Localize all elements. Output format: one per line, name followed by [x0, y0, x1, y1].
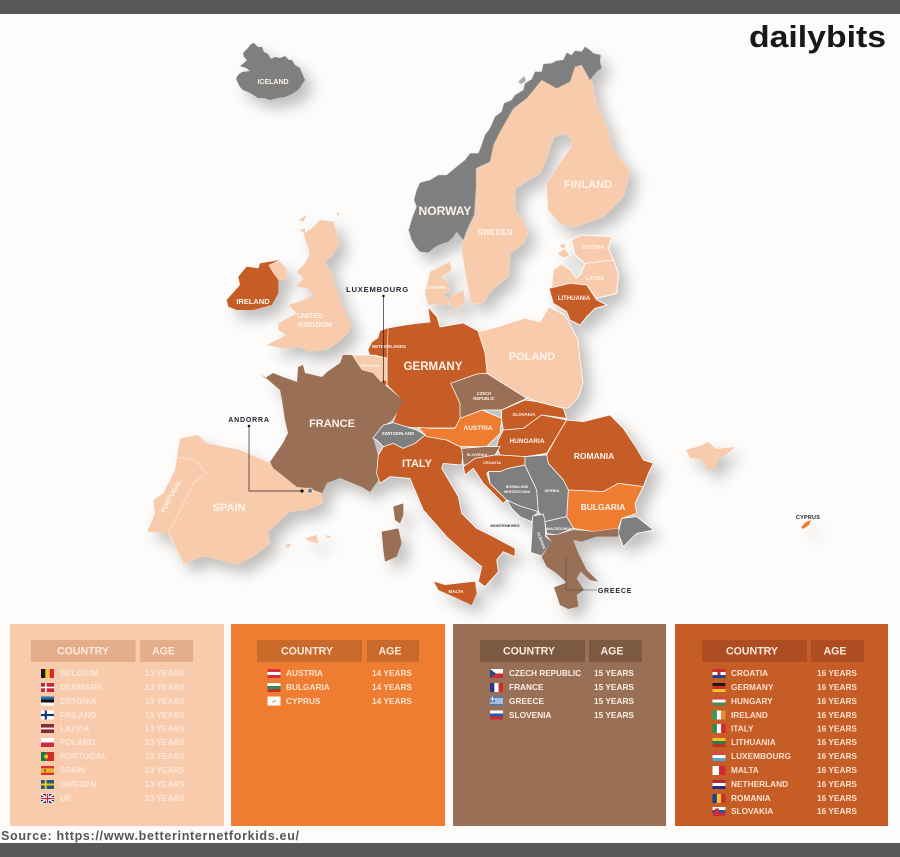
- rows: MALTA: [731, 765, 759, 775]
- country: Hungary: [497, 415, 567, 457]
- rows: 16 YEARS: [817, 696, 857, 706]
- rows: [712, 668, 857, 816]
- rows: GERMANY: [731, 682, 774, 692]
- rows: 16 YEARS: [817, 806, 857, 816]
- map country labels: MACEDONIA: [547, 526, 571, 531]
- country: Ireland: [227, 260, 280, 310]
- rows: FINLAND: [60, 710, 96, 720]
- country: Slovenia: [462, 447, 500, 465]
- rows: AUSTRIA: [286, 668, 323, 678]
- map country labels: SPAIN: [213, 502, 245, 514]
- country: Bulgaria: [567, 483, 643, 532]
- rows: 15 YEARS: [594, 682, 634, 692]
- country: Sicily and Malta: [434, 582, 477, 605]
- map country labels: NETHERLANDS: [372, 344, 406, 349]
- table header: AGE: [379, 646, 401, 658]
- panel: 15 years: [453, 624, 666, 826]
- rows: 16 YEARS: [817, 710, 857, 720]
- Andorra: [307, 488, 313, 493]
- rows: SLOVENIA: [509, 710, 551, 720]
- rows: 16 YEARS: [817, 668, 857, 678]
- country: Croatia: [463, 455, 525, 503]
- rows: 14 YEARS: [372, 682, 412, 692]
- table header: AGE: [824, 646, 846, 658]
- logo: dailybits: dailybits: [749, 19, 886, 54]
- rows: 13 YEARS: [145, 668, 185, 678]
- map country labels: ICELAND: [257, 79, 289, 86]
- small northern island: [518, 76, 526, 84]
- source line: Source: https://www.betterinternetforkids.eu/: [1, 829, 300, 843]
- map country labels: ESTONIA: [582, 245, 604, 251]
- rows: 13 YEARS: [145, 724, 185, 734]
- rows: PORTUGAL: [60, 751, 107, 761]
- Balearic islands: [285, 535, 332, 548]
- rows: UK: [60, 793, 72, 803]
- rows: 14 YEARS: [372, 696, 412, 706]
- panel: 16 years: [675, 624, 888, 826]
- rows: [268, 668, 412, 706]
- rows: SPAIN: [60, 765, 85, 775]
- callout: Greece: GREECE: [598, 588, 632, 595]
- western countries: [227, 213, 350, 352]
- Sardinia: [382, 528, 402, 562]
- map country labels: [160, 79, 625, 594]
- rows: BELGIUM: [60, 668, 98, 678]
- table header: AGE: [601, 646, 623, 658]
- country: Bosnia and Herzegovina: [488, 465, 538, 512]
- map country labels: CZECH: [477, 391, 491, 396]
- Iberia and islands: [147, 435, 403, 565]
- rows: GREECE: [509, 696, 545, 706]
- rows: LATVIA: [60, 724, 89, 734]
- table header: [702, 640, 864, 662]
- central and south-eastern countries: [373, 373, 653, 609]
- rows: CROATIA: [731, 668, 768, 678]
- map country labels: DENMARK: [424, 285, 447, 290]
- map country labels: HUNGARIA: [509, 438, 545, 445]
- map country labels: REPUBLIC: [473, 396, 495, 401]
- map country labels: UNITED: [297, 313, 323, 320]
- table header: COUNTRY: [281, 646, 333, 658]
- rows: 13 YEARS: [145, 696, 185, 706]
- country: Netherlands: [368, 328, 388, 358]
- callout: Luxembourg: [346, 285, 409, 383]
- rows: CYPRUS: [286, 696, 321, 706]
- country: Sweden: [462, 80, 570, 303]
- rows: 16 YEARS: [817, 793, 857, 803]
- rows: 16 YEARS: [817, 724, 857, 734]
- country: Greece: [542, 528, 618, 609]
- callout: Cyprus: CYPRUS: [796, 515, 820, 521]
- map country labels: ALBANIA: [536, 531, 547, 550]
- country: Serbia: [525, 455, 568, 522]
- map country labels: FINLAND: [564, 179, 612, 191]
- country: Spain and Portugal: [147, 435, 323, 565]
- callout: Greece: [566, 557, 632, 595]
- eastern island: [686, 442, 735, 470]
- rows: POLAND: [60, 737, 95, 747]
- map country labels: SLOVAKIA: [513, 412, 536, 417]
- map country labels: GERMANY: [404, 361, 463, 373]
- Nordic and Baltic countries: [409, 47, 630, 325]
- table header: COUNTRY: [726, 646, 778, 658]
- rows: 16 YEARS: [817, 779, 857, 789]
- country: Belgium: [352, 355, 387, 387]
- map country labels: AUSTRIA: [464, 425, 493, 432]
- callout: Andorra: [228, 417, 304, 493]
- country: Czech Republic: [451, 373, 527, 418]
- rows: 16 YEARS: [817, 682, 857, 692]
- rows: NETHERLAND: [731, 779, 788, 789]
- rows: 13 YEARS: [145, 779, 185, 789]
- country: Italy: [377, 435, 515, 587]
- map country labels: POLAND: [509, 351, 555, 363]
- rows: ROMANIA: [731, 793, 771, 803]
- rows: IRELAND: [731, 710, 768, 720]
- rows: 13 YEARS: [145, 737, 185, 747]
- table header: [257, 640, 419, 662]
- country: Switzerland: [373, 423, 425, 448]
- map country labels: ITALY: [402, 458, 433, 470]
- Portugal border: [168, 457, 207, 563]
- country: Austria: [418, 410, 502, 447]
- rows: 15 YEARS: [594, 668, 634, 678]
- rows: 13 YEARS: [145, 751, 185, 761]
- table header: [480, 640, 642, 662]
- country: Latvia: [549, 260, 618, 298]
- rows: DENMARK: [60, 682, 102, 692]
- country: Romania: [547, 415, 653, 492]
- country: Albania: [531, 514, 552, 556]
- rows: [490, 668, 634, 720]
- country: France: [260, 355, 403, 493]
- rows: HUNGARY: [731, 696, 773, 706]
- country: Poland: [478, 307, 583, 408]
- rows: 16 YEARS: [817, 765, 857, 775]
- country: Montenegro: [507, 500, 538, 522]
- rows: 13 YEARS: [145, 682, 185, 692]
- country: Lithuania: [549, 283, 607, 325]
- country: Denmark: [425, 262, 465, 315]
- rows: SLOVAKIA: [731, 806, 773, 816]
- country: United Kingdom: [267, 213, 350, 352]
- country: Estonia: [557, 235, 613, 263]
- map country labels: SERBIA: [544, 488, 560, 493]
- callout: Luxembourg: LUXEMBOURG: [346, 285, 409, 294]
- country: Finland: [547, 67, 630, 227]
- rows: ESTONIA: [60, 696, 97, 706]
- map country labels: SWITZERLAND: [382, 431, 415, 436]
- country: Luxembourg: [381, 380, 387, 386]
- country: Slovakia: [502, 400, 567, 430]
- panel: 14 years: [231, 624, 445, 826]
- map country labels: LATVIA: [586, 276, 604, 282]
- rows: 16 YEARS: [817, 737, 857, 747]
- map country labels: BOSNIA AND: [506, 485, 529, 489]
- country: Macedonia: [545, 517, 573, 535]
- map country labels: SLOVENIA: [467, 452, 487, 457]
- rows: 13 YEARS: [145, 765, 185, 775]
- map country labels: BULGARIA: [581, 502, 625, 512]
- country: Norway: [409, 47, 602, 253]
- rows: ITALY: [731, 724, 754, 734]
- table header: COUNTRY: [57, 646, 109, 658]
- rows: LUXEMBOURG: [731, 751, 791, 761]
- map country labels: CROATIA: [483, 460, 501, 465]
- rows: 15 YEARS: [594, 696, 634, 706]
- map country labels: FRANCE: [309, 418, 355, 430]
- country: Iceland: [236, 43, 305, 100]
- rows: CZECH REPUBLIC: [509, 668, 581, 678]
- rows: 13 YEARS: [145, 793, 185, 803]
- map country labels: MONTENEGRO: [490, 523, 520, 528]
- table header: COUNTRY: [503, 646, 555, 658]
- map country labels: BELGIUM: [361, 363, 380, 368]
- map country labels: KINGDOM: [298, 322, 332, 329]
- map country labels: LITHUANIA: [558, 296, 591, 302]
- country: Cyprus: [801, 520, 811, 529]
- rows: BULGARIA: [286, 682, 330, 692]
- map country labels: HERZEGOVINA: [504, 490, 531, 494]
- rows: 13 YEARS: [145, 710, 185, 720]
- map country labels: IRELAND: [236, 297, 270, 306]
- rows: FRANCE: [509, 682, 544, 692]
- rows: SWEDEN: [60, 779, 96, 789]
- country: Germany: [387, 307, 487, 428]
- rows: [41, 668, 185, 803]
- callout: Andorra: ANDORRA: [228, 417, 270, 424]
- rows: 15 YEARS: [594, 710, 634, 720]
- rows: LITHUANIA: [731, 737, 776, 747]
- map country labels: NORWAY: [418, 206, 472, 218]
- top bar: [0, 0, 900, 14]
- country: Turkey (Thrace): [618, 517, 653, 547]
- map country labels: ROMANIA: [574, 451, 614, 461]
- map country labels: MALTA: [448, 589, 464, 594]
- table header: [31, 640, 193, 662]
- rows: 14 YEARS: [372, 668, 412, 678]
- panel: 13 years: [10, 624, 224, 826]
- rows: 16 YEARS: [817, 751, 857, 761]
- map country labels: PORTUGAL: [160, 479, 183, 514]
- table header: AGE: [152, 646, 175, 658]
- bottom bar: [0, 843, 900, 857]
- map country labels: SWEDEN: [477, 228, 513, 237]
- Corsica: [393, 503, 403, 523]
